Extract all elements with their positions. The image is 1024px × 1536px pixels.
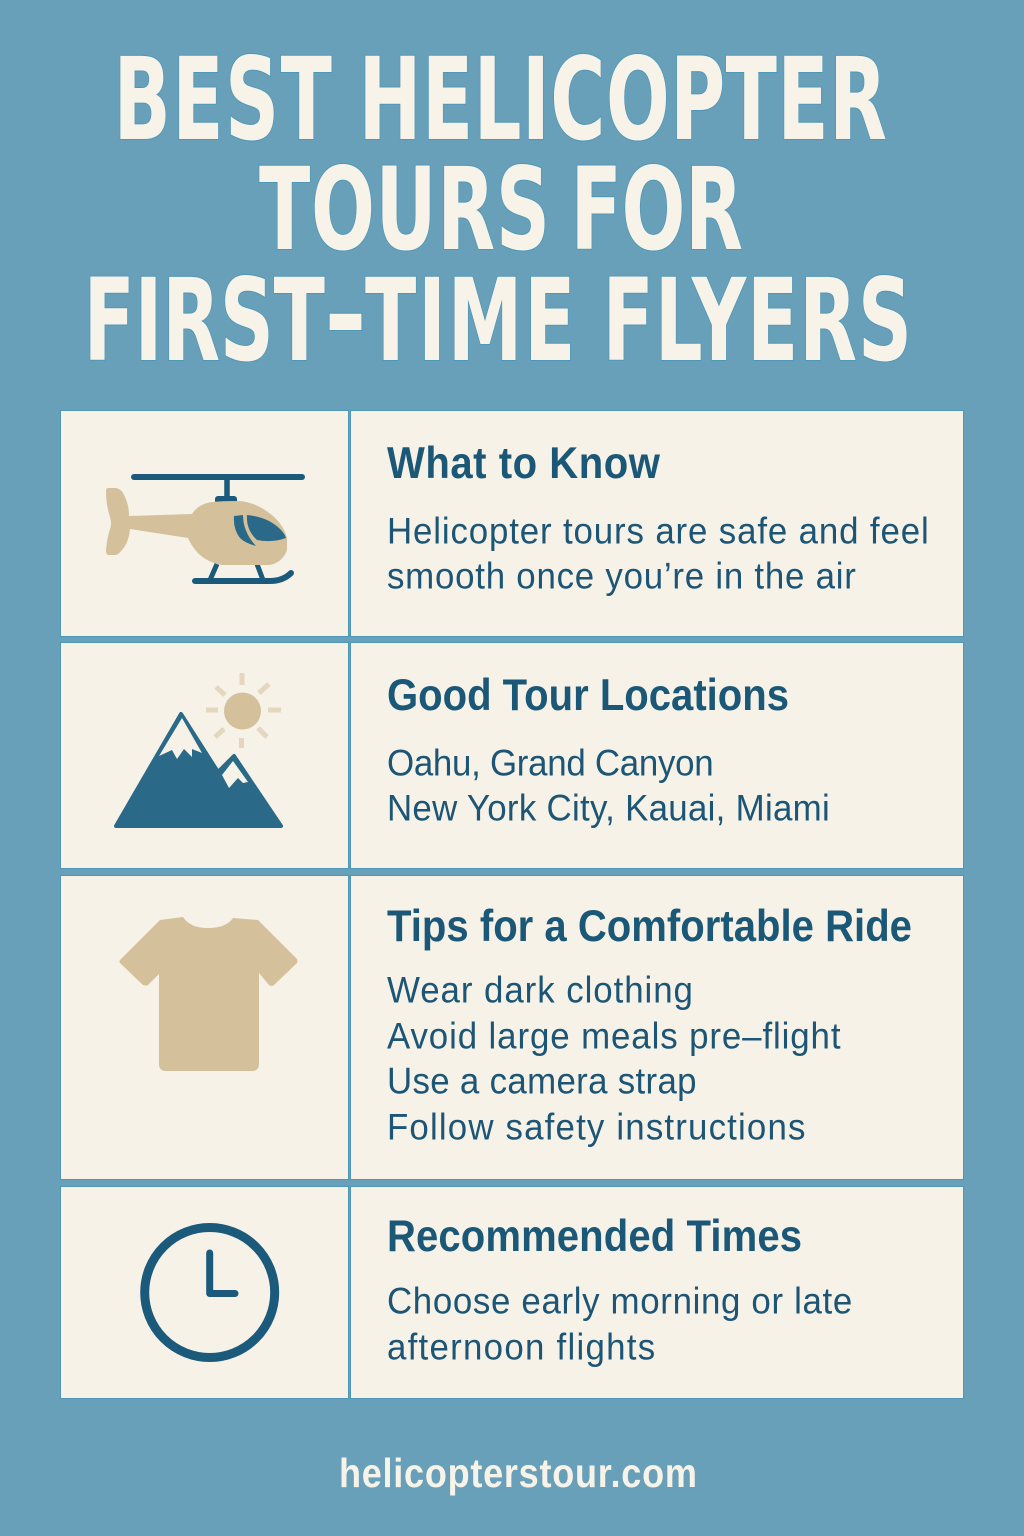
icon: helicopter xyxy=(106,477,302,581)
icon: t-shirt xyxy=(120,917,298,1071)
text: recommended times: Choose early morning or late xyxy=(387,1280,852,1322)
panel: good tour locations xyxy=(60,642,964,868)
heading: recommended times: Recommended Times xyxy=(387,1211,802,1260)
text: recommended times: afternoon flights xyxy=(387,1326,655,1368)
icon: clock xyxy=(145,1228,275,1358)
text: what to know: smooth once you’re in the air xyxy=(387,555,856,597)
text: what to know xyxy=(387,509,929,597)
icon: mountains and sun xyxy=(116,673,281,826)
text: good tour locations xyxy=(387,741,830,829)
heading: good tour locations: Good Tour Locations xyxy=(387,670,789,719)
title: TIME xyxy=(365,254,576,387)
panel: what to know xyxy=(60,410,964,636)
title xyxy=(83,33,912,387)
title: HELICOPTER xyxy=(359,33,887,166)
text: tips list: Use a camera strap xyxy=(387,1060,697,1102)
panel: comfortable ride tips xyxy=(60,876,964,1180)
title: - xyxy=(324,249,367,382)
footer: website: helicopterstour.com xyxy=(339,1451,697,1497)
text: tips list: Wear dark clothing xyxy=(387,969,693,1011)
text: recommended times xyxy=(387,1280,852,1368)
title: FLYERS xyxy=(603,254,912,387)
text: good tour locations: Oahu, Grand Canyon xyxy=(387,741,714,784)
title: FIRST xyxy=(83,254,325,387)
text: what to know: Helicopter tours are safe and feel xyxy=(387,509,929,552)
title: FOR xyxy=(571,143,743,276)
text: tips list: Follow safety instructions xyxy=(387,1106,805,1148)
title: BEST xyxy=(114,33,332,166)
panel: recommended times xyxy=(60,1186,964,1398)
title: TOURS xyxy=(259,143,550,276)
heading: what to know: What to Know xyxy=(387,438,660,487)
heading: tips: Tips for a Comfortable Ride xyxy=(387,901,912,950)
text: tips list: Avoid large meals pre–flight xyxy=(387,1015,841,1057)
text: tips list xyxy=(387,969,841,1148)
text: good tour locations: New York City, Kauai, Miami xyxy=(387,787,830,829)
